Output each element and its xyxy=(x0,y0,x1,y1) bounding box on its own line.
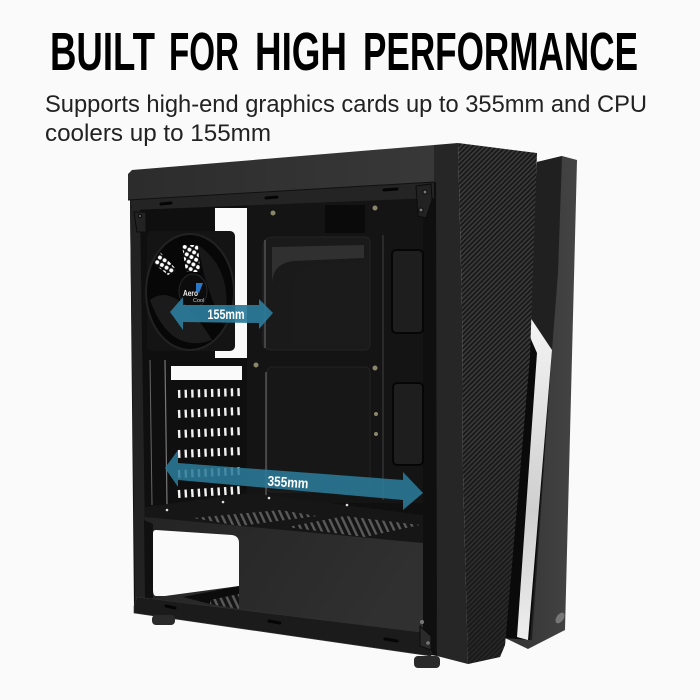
title xyxy=(50,22,638,82)
CPU cut-out xyxy=(263,237,370,350)
PCI expansion slots xyxy=(171,366,242,494)
subtitle: coolers up to 155mm xyxy=(45,120,271,147)
motherboard tray xyxy=(247,198,423,503)
PSU lower floor and mesh xyxy=(183,586,239,609)
fan hub logo: Aero xyxy=(183,289,198,298)
lower tray cut-out xyxy=(267,367,370,492)
floor standoffs xyxy=(166,497,348,511)
feet xyxy=(152,615,440,668)
cable holes xyxy=(392,250,423,333)
interior cavity xyxy=(130,182,437,656)
rear fan xyxy=(146,231,235,351)
left frame and rear rails xyxy=(130,208,167,600)
PSU cut-out xyxy=(153,530,239,596)
arrow: 155mm CPU cooler clearance xyxy=(170,297,273,330)
top panel xyxy=(128,145,434,210)
rear cut-out opening xyxy=(215,208,247,358)
side strip of front panel xyxy=(434,143,468,664)
PC case illustration xyxy=(128,143,577,668)
case floor with mesh vents xyxy=(145,493,423,543)
standoff screws xyxy=(254,206,378,436)
arrow: 355mm graphics card clearance: 355mm xyxy=(267,473,309,491)
fan hub logo: Cool xyxy=(193,298,204,304)
corner brackets xyxy=(134,184,432,232)
fan grille highlights xyxy=(153,245,200,275)
PSU shroud xyxy=(145,517,423,645)
top lip slots xyxy=(161,189,397,204)
title: BUILT xyxy=(50,22,155,82)
left shroud post xyxy=(144,520,153,600)
subtitle: Supports high-end graphics cards up to 355mm and CPU xyxy=(45,91,647,118)
arrow: 155mm CPU cooler clearance: 155mm xyxy=(208,306,244,322)
arrow: 355mm graphics card clearance xyxy=(165,450,423,510)
subtitle xyxy=(45,91,647,147)
white accent stripe xyxy=(517,317,552,640)
fan hub logo xyxy=(179,274,207,308)
title: FOR xyxy=(169,22,239,82)
case badge logo xyxy=(554,611,566,625)
carbon-textured front panel xyxy=(458,143,537,664)
base rail xyxy=(134,597,431,656)
title: HIGH xyxy=(255,22,347,82)
case rear spine xyxy=(505,156,577,649)
